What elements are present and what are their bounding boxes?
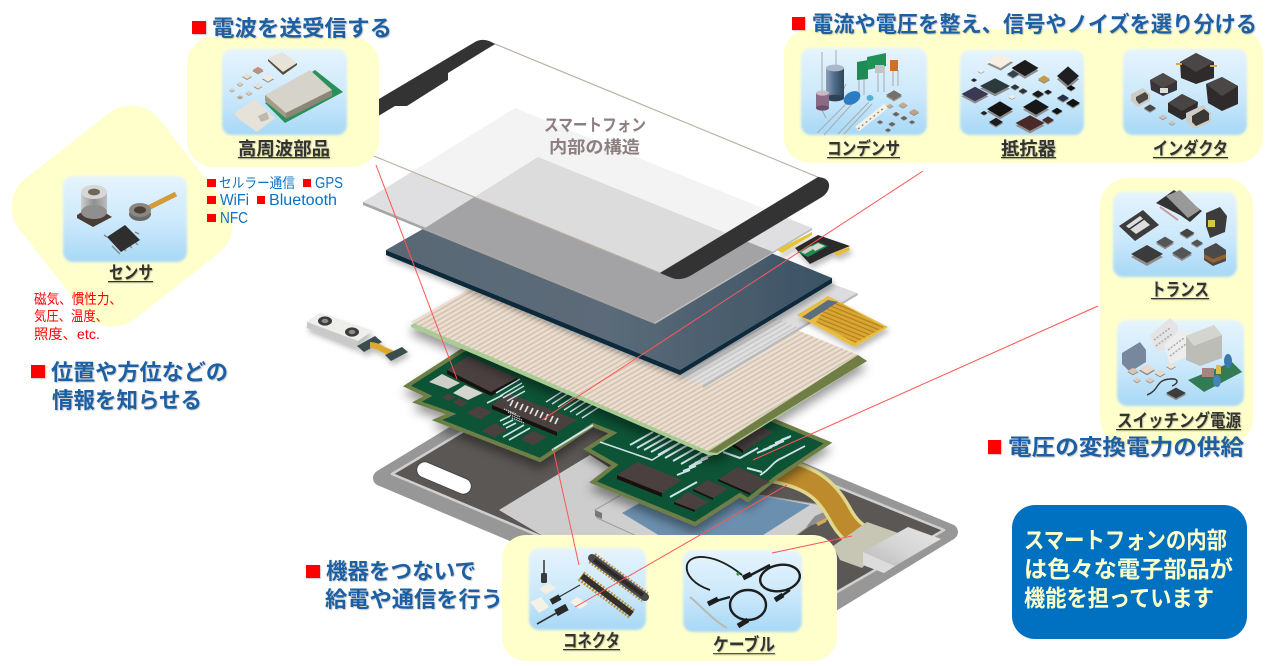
icon: radio modules bbox=[229, 52, 343, 132]
board chips bbox=[429, 356, 773, 512]
display panel bbox=[425, 157, 773, 322]
dark display plate bbox=[386, 160, 832, 375]
cover glass bbox=[320, 40, 829, 279]
diagram caption: スマートフォン bbox=[544, 116, 646, 135]
board traces bbox=[487, 379, 805, 497]
callout: は色々な電子部品が bbox=[1024, 556, 1233, 582]
icon: transformers bbox=[1119, 190, 1227, 266]
radio standards list: WiFi bbox=[220, 192, 249, 209]
panel: sensor bbox=[0, 91, 247, 341]
heading: radio: 電波を送受信する bbox=[212, 16, 392, 41]
radio standards list: GPS bbox=[315, 175, 343, 192]
icon: capacitors bbox=[816, 50, 919, 135]
sensor types list: 気圧、温度、 bbox=[34, 308, 108, 324]
label: resistor: 抵抗器 bbox=[1001, 139, 1056, 159]
label: capacitor: コンデンサ bbox=[827, 138, 900, 159]
heading: position: 情報を知らせる bbox=[52, 388, 202, 413]
label: sensor: センサ bbox=[109, 263, 153, 283]
label: cable: ケーブル bbox=[713, 634, 775, 655]
grey stripe sheet bbox=[540, 190, 858, 388]
sensor types list: 磁気、慣性力、 bbox=[34, 291, 122, 307]
callout bbox=[1012, 505, 1247, 639]
heading: connection: 給電や通信を行う bbox=[325, 587, 503, 612]
panel: power components bbox=[1100, 178, 1253, 446]
flexible circuit: display bbox=[797, 296, 888, 347]
glass top bezel bbox=[320, 40, 495, 150]
icon: inductors bbox=[1131, 53, 1238, 129]
label: switching power supply: スイッチング電源 bbox=[1117, 410, 1241, 431]
heading: position: 位置や方位などの bbox=[51, 360, 228, 385]
panel: radio frequency parts bbox=[187, 37, 379, 167]
icon: sensor parts bbox=[77, 185, 176, 254]
red leader lines bbox=[376, 165, 1098, 607]
heading: filtering: 電流や電圧を整え、信号やノイズを選り分ける bbox=[812, 12, 1257, 37]
icon: resistors bbox=[962, 53, 1080, 133]
heading: position bbox=[31, 360, 228, 413]
phone case bbox=[381, 370, 950, 642]
icon: connectors bbox=[530, 558, 645, 624]
radio standards list: Bluetooth bbox=[269, 192, 337, 209]
label: radio frequency parts: 高周波部品 bbox=[238, 139, 330, 159]
radio standards list: セルラー通信 bbox=[219, 175, 295, 191]
radio standards list bbox=[207, 175, 343, 227]
heading: power: 電圧の変換電力の供給 bbox=[1008, 435, 1244, 460]
diagram caption bbox=[544, 116, 646, 157]
connector block bbox=[833, 522, 941, 573]
panel: passive components bbox=[784, 29, 1263, 163]
label: connector: コネクタ bbox=[563, 631, 620, 651]
callout: スマートフォンの内部 bbox=[1024, 527, 1227, 553]
front sheet bbox=[363, 108, 812, 324]
glass bottom bezel bbox=[660, 177, 829, 279]
touch sensor connector bbox=[777, 232, 850, 264]
icon: cables bbox=[687, 557, 802, 628]
heading: connection bbox=[306, 559, 503, 612]
camera module bbox=[307, 313, 408, 361]
circuit board bbox=[407, 320, 828, 524]
label: transformer: トランス bbox=[1151, 280, 1209, 300]
sensor types list: 照度、etc. bbox=[34, 326, 100, 342]
sensor types list bbox=[34, 291, 122, 342]
callout: 機能を担っています bbox=[1024, 585, 1214, 611]
battery bbox=[595, 478, 835, 560]
flexible cable bbox=[775, 470, 880, 546]
label: inductor: インダクタ bbox=[1153, 138, 1228, 159]
panel: connectors and cables bbox=[502, 535, 837, 661]
diagram caption: 内部の構造 bbox=[549, 138, 640, 157]
heading: connection: 機器をつないで bbox=[326, 559, 476, 584]
icon: switching power supplies bbox=[1122, 318, 1242, 400]
striped sheet bbox=[411, 235, 867, 455]
radio standards list: NFC bbox=[220, 210, 248, 227]
